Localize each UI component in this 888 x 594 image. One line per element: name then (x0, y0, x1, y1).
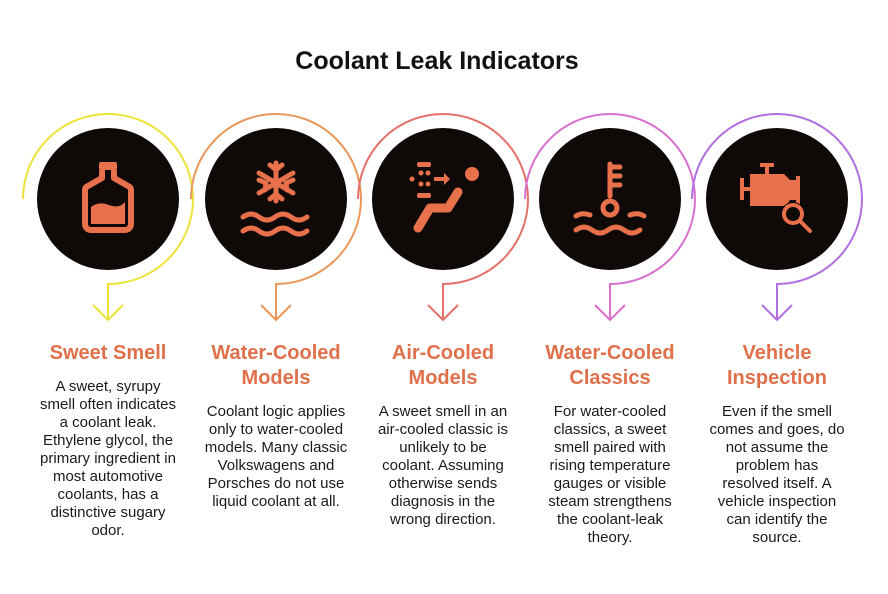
text: vehicle inspection: problem has (736, 457, 818, 474)
text: sweet smell: odor. (91, 522, 125, 539)
text: air-cooled models: wrong direction. (390, 511, 496, 528)
text: vehicle inspection: can identify the (727, 511, 827, 528)
text: water-cooled models: Coolant logic applies (207, 403, 345, 420)
text: water-cooled classics: gauges or visible (554, 475, 666, 492)
text: water-cooled models: liquid coolant at all. (212, 493, 340, 510)
text: air-cooled models: otherwise sends (389, 475, 497, 492)
text: water-cooled classics: Water-Cooled (545, 342, 675, 364)
text: vehicle inspection: vehicle inspection (718, 493, 836, 510)
icon: engine magnifier (740, 163, 810, 231)
text: air-cooled models (378, 342, 508, 528)
text: water-cooled classics: smell paired with (554, 439, 666, 456)
icon: temperature water (576, 164, 644, 233)
text: air-cooled models: A sweet smell in an (379, 403, 507, 420)
icon: bottle (85, 162, 131, 230)
text: water-cooled classics (545, 342, 675, 546)
text: vehicle inspection: comes and goes, do (709, 421, 845, 438)
text: water-cooled models: only to water-cooled (209, 421, 343, 438)
step 1 circle (23, 114, 193, 320)
text: air-cooled models: Models (409, 367, 477, 389)
text: sweet smell: distinctive sugary (50, 504, 166, 521)
text: sweet smell (40, 342, 176, 539)
step 2 circle (191, 114, 361, 320)
text: vehicle inspection: Inspection (727, 367, 827, 389)
text: air-cooled models: unlikely to be (399, 439, 487, 456)
text: vehicle inspection: Vehicle (743, 342, 811, 364)
text: air-cooled models: air-cooled classic is (378, 421, 508, 438)
title: Coolant Leak Indicators (295, 47, 579, 75)
text: water-cooled models: Porsches do not use (208, 475, 344, 492)
text: water-cooled models: Water-Cooled (211, 342, 341, 364)
text: sweet smell: primary ingredient in (40, 450, 176, 467)
text: water-cooled models: Models (242, 367, 310, 389)
text: water-cooled models: models. Many classic (205, 439, 347, 456)
text: vehicle inspection: source. (752, 529, 802, 546)
text: air-cooled models: Air-Cooled (392, 342, 494, 364)
text: sweet smell: Sweet Smell (50, 342, 166, 364)
icon: snowflake water (243, 163, 307, 234)
text: water-cooled classics: For water-cooled (554, 403, 666, 420)
text: sweet smell: most automotive (53, 468, 163, 485)
text: vehicle inspection (709, 342, 845, 546)
text: air-cooled models: diagnosis in the (391, 493, 495, 510)
text: water-cooled classics: the coolant-leak (557, 511, 663, 528)
text: vehicle inspection: resolved itself. A (722, 475, 832, 492)
text: water-cooled classics: Classics (569, 367, 651, 389)
step 3 circle (358, 114, 528, 320)
text: water-cooled classics: steam strengthens (548, 493, 672, 510)
text: vehicle inspection: not assume the (726, 439, 828, 456)
icon: seat airflow (410, 162, 479, 228)
text: water-cooled classics: classics, a sweet (554, 421, 666, 438)
text: sweet smell: coolants, has a (58, 486, 158, 503)
text: water-cooled models: Volkswagens and (218, 457, 334, 474)
step 5 circle (692, 114, 862, 320)
text: sweet smell: A sweet, syrupy (55, 378, 161, 395)
text: air-cooled models: coolant. Assuming (382, 457, 504, 474)
step 4 circle (525, 114, 695, 320)
text: water-cooled classics: rising temperature (550, 457, 670, 474)
text: sweet smell: a coolant leak. (60, 414, 156, 431)
text: water-cooled models (205, 342, 347, 510)
text: sweet smell: smell often indicates (40, 396, 176, 413)
text: water-cooled classics: theory. (588, 529, 632, 546)
text: vehicle inspection: Even if the smell (722, 403, 832, 420)
text: sweet smell: Ethylene glycol, the (43, 432, 173, 449)
